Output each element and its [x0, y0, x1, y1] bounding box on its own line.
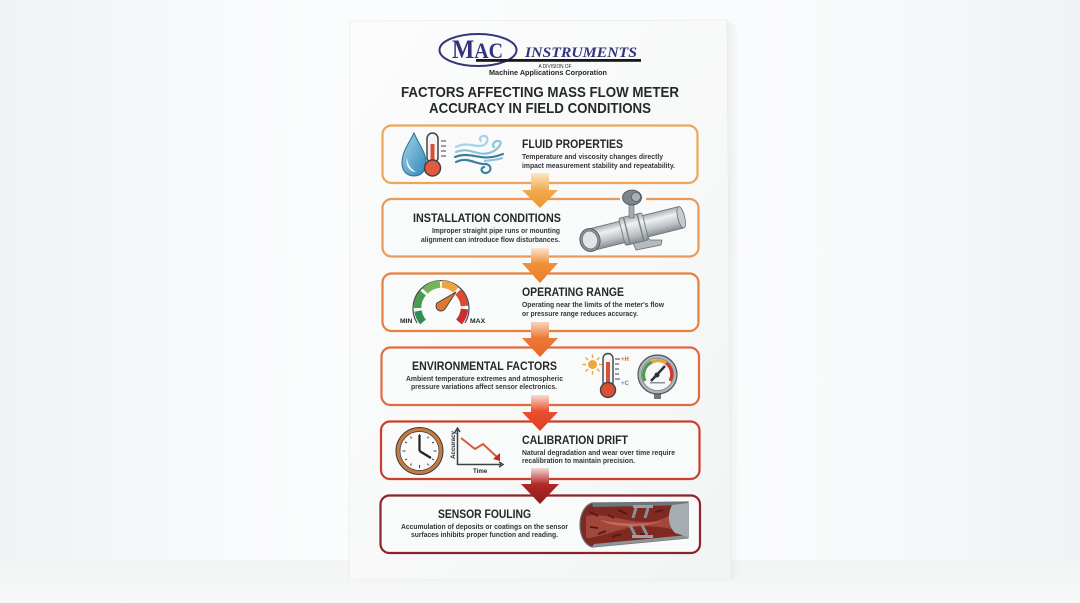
heading: sensor fouling: SENSOR FOULING	[438, 507, 531, 521]
panel: calibration drift	[381, 422, 700, 479]
title: ACCURACY IN FIELD CONDITIONS	[429, 100, 651, 117]
label: min: MIN	[400, 318, 413, 325]
text: fluid properties: Temperature and viscosity changes directly	[522, 152, 664, 161]
text: operating range: or pressure range reduces accuracy.	[522, 309, 638, 318]
transmitter	[629, 204, 634, 218]
text: operating range: Operating near the limits of the meter's flow	[522, 300, 664, 309]
text: sensor fouling: Accumulation of deposits or coatings on the sensor	[401, 522, 568, 531]
icon: fouled pipe cutaway	[580, 502, 688, 547]
text: calibration drift: recalibration to maintain precision.	[522, 456, 635, 465]
poster shadow	[727, 22, 740, 580]
logo ellipse	[440, 34, 516, 66]
arrow: installation to operating	[522, 248, 558, 283]
logo underline bar	[476, 59, 641, 62]
text: installation conditions: Improper straight pipe runs or mounting	[432, 226, 560, 235]
heading: calibration drift: CALIBRATION DRIFT	[522, 433, 629, 447]
heading: fluid properties: FLUID PROPERTIES	[522, 137, 623, 151]
icon: pipe with flow meter	[577, 190, 688, 256]
title	[401, 84, 679, 117]
logo corporation name: Machine Applications Corporation	[489, 68, 607, 77]
icon: wind	[455, 136, 503, 173]
arrow: operating to environmental	[522, 322, 558, 357]
text: installation conditions: alignment can introduce flow disturbances.	[421, 235, 560, 244]
logo: MAC Instruments	[440, 34, 641, 77]
icon: thermometer	[424, 133, 446, 176]
text: sensor fouling	[401, 522, 568, 539]
text: environmental factors: Ambient temperature extremes and atmospheric	[406, 374, 563, 383]
text: sensor fouling: surfaces inhibits proper function and reading.	[411, 530, 558, 539]
label: max: MAX	[470, 318, 486, 325]
stand	[631, 232, 662, 250]
icon: gauge	[400, 281, 486, 325]
panel: environmental factors	[382, 348, 699, 405]
logo MAC wordmark: MAC	[452, 35, 503, 64]
icon: water drop	[402, 133, 426, 176]
text: environmental factors	[406, 374, 563, 391]
text: operating range	[522, 300, 664, 318]
axis label: time: Time	[473, 468, 488, 475]
text: calibration drift	[522, 448, 675, 465]
poster board	[349, 20, 731, 580]
heading: installation conditions: INSTALLATION CONDITIONS	[413, 211, 561, 225]
text: installation conditions	[421, 226, 560, 244]
arrow: fluid to installation	[522, 173, 558, 208]
floor	[0, 560, 1080, 603]
icon: clock	[396, 428, 443, 474]
logo INSTRUMENTS wordmark: INSTRUMENTS	[524, 45, 637, 61]
panel: installation conditions	[382, 190, 698, 256]
panel: sensor fouling	[380, 496, 700, 553]
arrow: environmental to calibration	[522, 395, 558, 431]
chart: accuracy over time	[450, 428, 503, 475]
pipe body	[577, 203, 688, 256]
text: calibration drift: Natural degradation and wear over time require	[522, 448, 675, 457]
text: fluid properties	[522, 152, 675, 170]
text: environmental factors: pressure variations affect sensor electronics.	[411, 382, 557, 391]
icon: pressure gauge	[638, 355, 677, 399]
logo division line: A DIVISION OF	[538, 64, 572, 70]
axis label: accuracy: Accuracy	[450, 430, 457, 459]
heading: operating range: OPERATING RANGE	[522, 285, 624, 299]
icon: sun	[582, 354, 602, 374]
icon: thermometer with scale	[600, 354, 630, 398]
label: cold scale: +C	[621, 381, 630, 387]
heading: environmental factors: ENVIRONMENTAL FACTORS	[412, 359, 557, 373]
panel: fluid properties	[382, 126, 698, 183]
label: hot scale: +H	[621, 357, 629, 363]
arrow: calibration to sensor fouling	[521, 468, 559, 504]
panel: operating range	[382, 274, 698, 331]
text: fluid properties: impact measurement stability and repeatability.	[522, 161, 675, 170]
title: FACTORS AFFECTING MASS FLOW METER	[401, 84, 679, 101]
